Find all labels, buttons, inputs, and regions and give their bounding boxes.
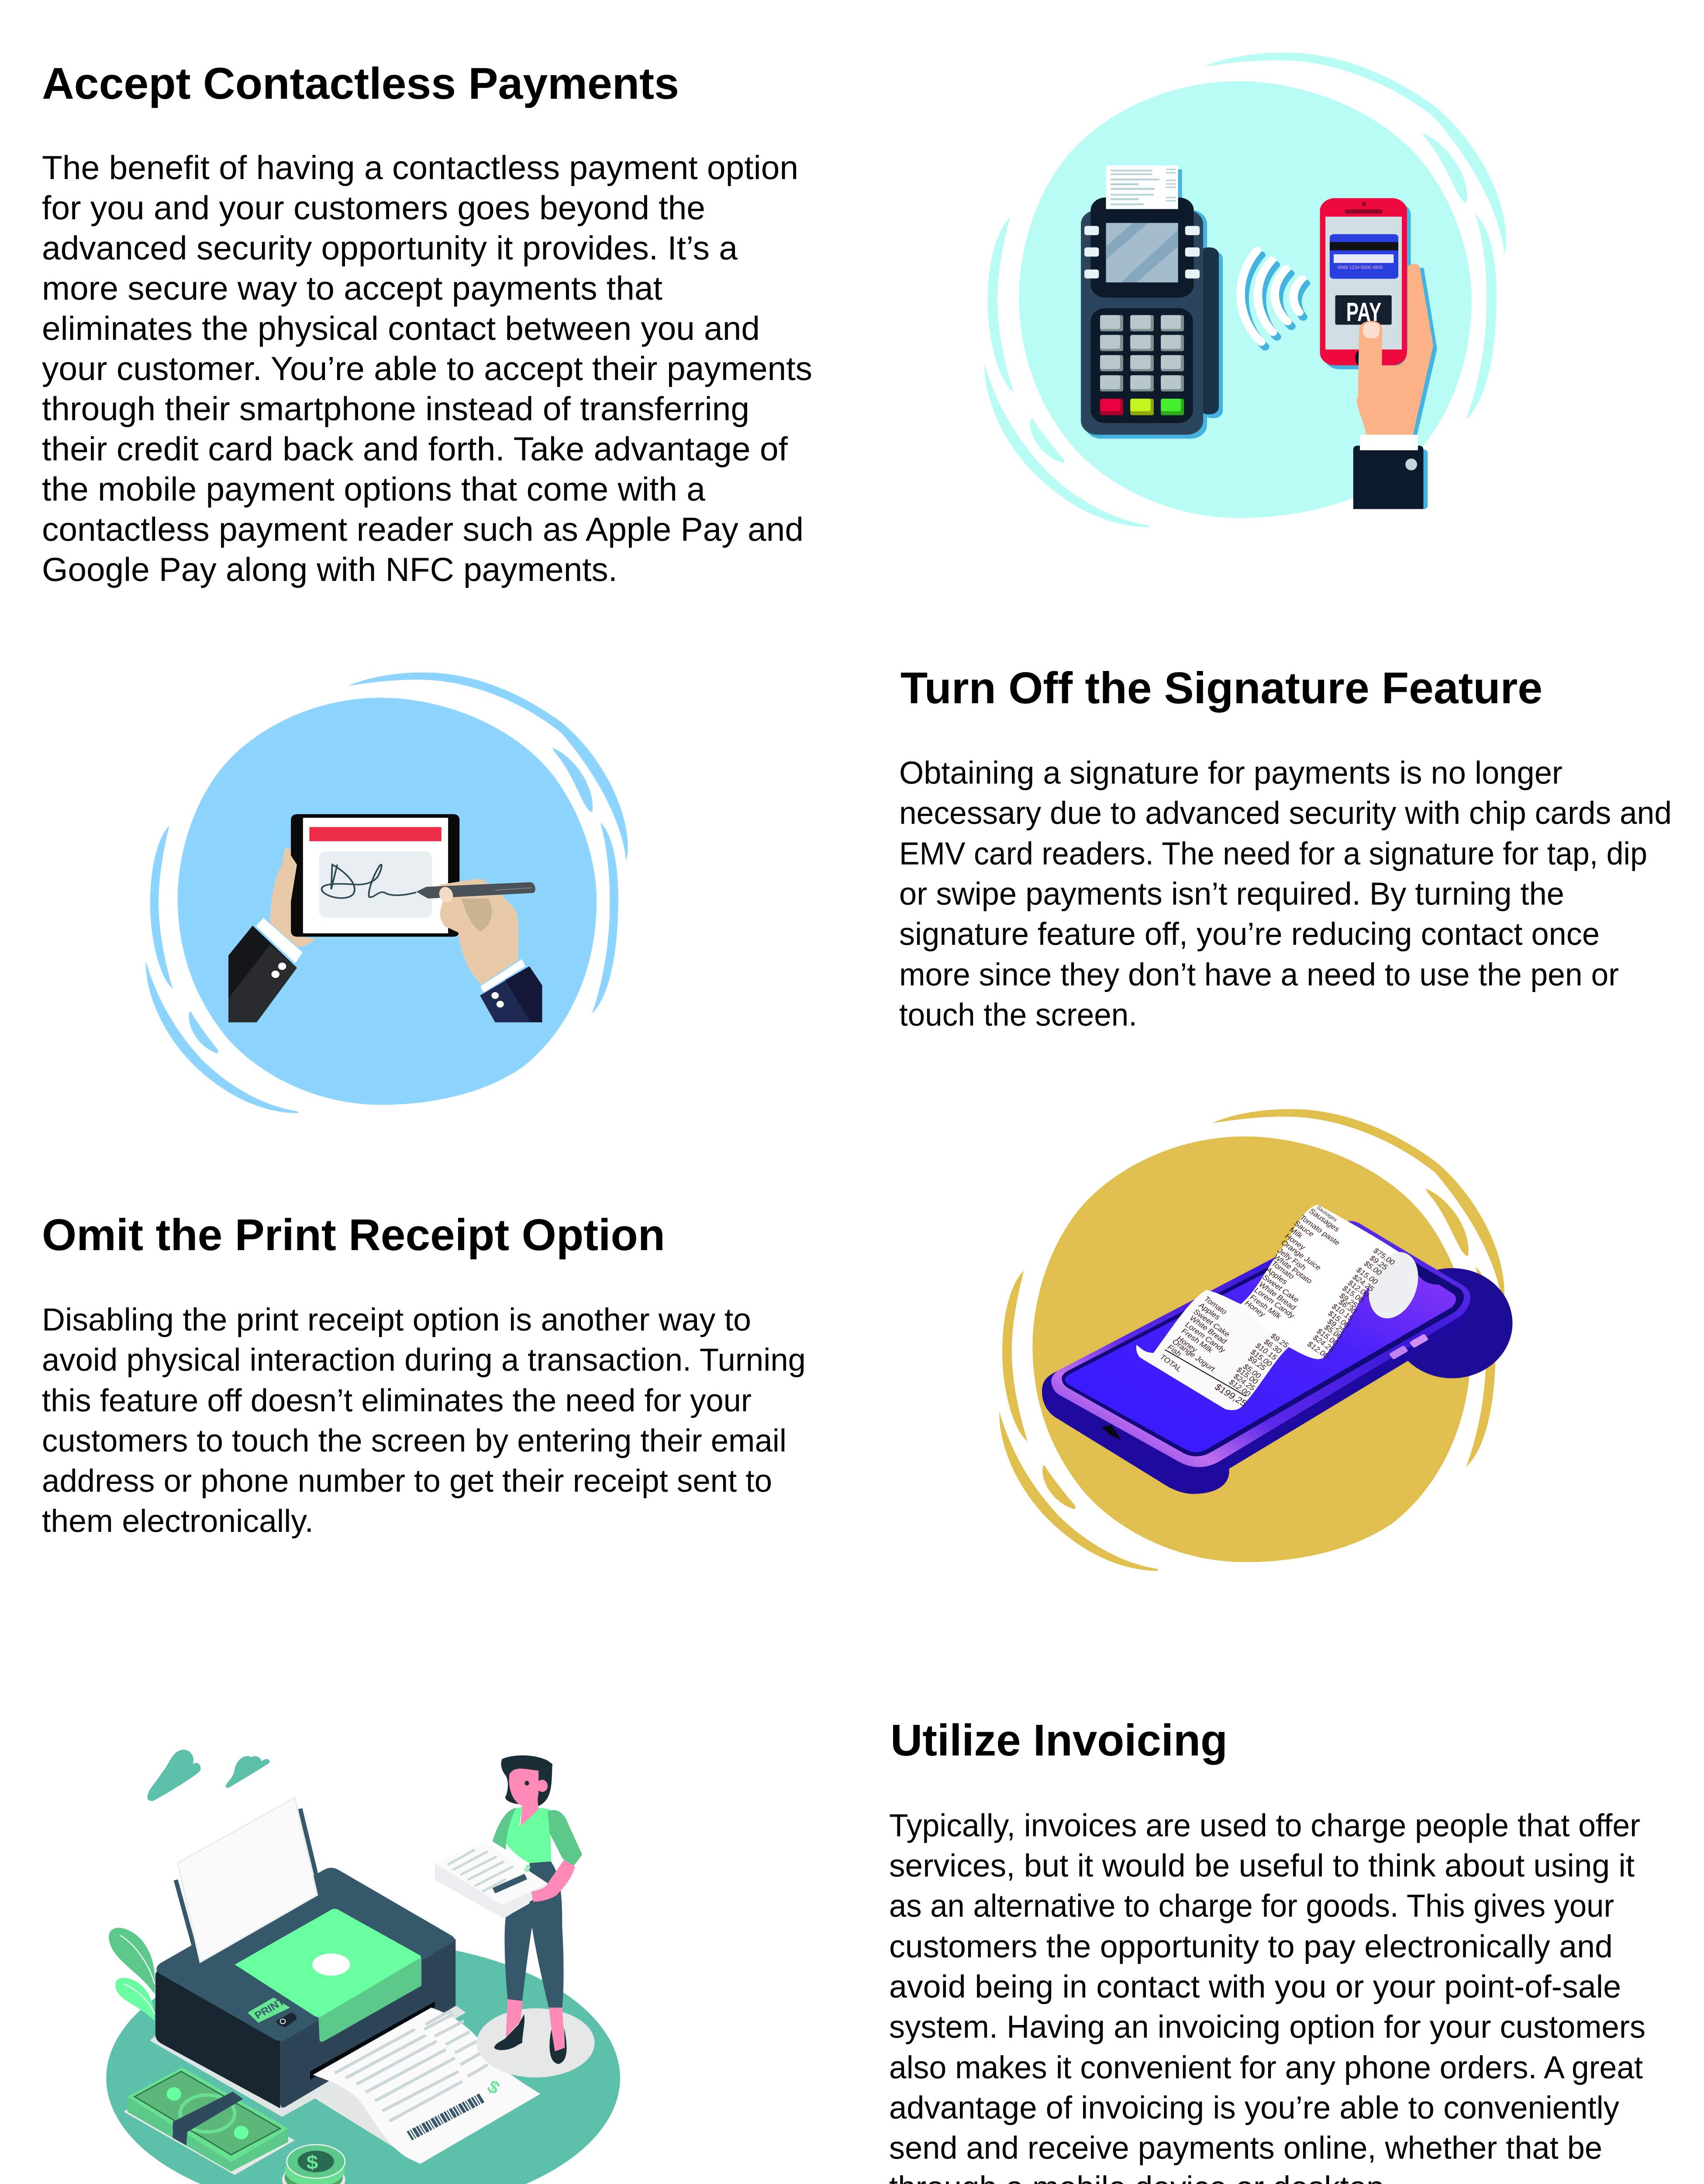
icon: contactless waves	[1241, 250, 1306, 347]
icon: receipt roll: $5.00	[1322, 1323, 1344, 1341]
icon: receipt roll: Milk	[1287, 1226, 1305, 1240]
text block: receipt body: Disabling the print receipt option is another way to	[42, 1302, 751, 1337]
text block: signature body: touch the screen.	[899, 997, 1137, 1033]
text block: contactless body: the mobile payment options that come with a	[42, 471, 705, 508]
icon: receipt roll: $75.00	[1372, 1247, 1397, 1267]
icon: coins: $	[307, 2151, 318, 2173]
icon: right hand with stylus	[416, 878, 542, 1022]
icon: receipt roll: $24.25	[1351, 1273, 1376, 1293]
icon: phone with pay button: 0068 1234 0000 4800	[1338, 265, 1383, 270]
icon: receipt roll: $5.00	[1241, 1362, 1263, 1380]
text block: receipt body: address or phone number to get their receipt sent to	[42, 1463, 772, 1499]
text block: contactless body: The benefit of having a contactless payment option	[42, 149, 798, 187]
icon: receipt roll: $9.25	[1338, 1292, 1359, 1309]
icon: receipt roll: Sweet Cake	[1192, 1308, 1232, 1338]
illustration: printer, money and woman	[106, 1749, 620, 2184]
icon: stack of cash	[124, 2067, 295, 2175]
icon: receipt roll: $15.00	[1341, 1284, 1366, 1304]
text block: invoicing body: as an alternative to charge for goods. This gives your	[889, 1888, 1614, 1924]
icon: receipt roll: Orange Juice	[1279, 1238, 1323, 1272]
illustration: signing on a tablet	[146, 673, 628, 1113]
icon: receipt roll: Fresh Milk	[1248, 1293, 1283, 1320]
icon: receipt roll: TOTAL	[1158, 1353, 1184, 1373]
text block: contactless body: their credit card back and forth. Take advantage of	[42, 431, 788, 468]
icon: receipt roll: White Bread	[1188, 1314, 1229, 1345]
panel: Utilize Invoicing	[106, 1715, 1645, 2184]
icon: receipt roll: $15.00	[1249, 1348, 1274, 1368]
text block: contactless body: Google Pay along with NFC payments.	[42, 551, 617, 588]
icon: receipt roll: Lorem Candy	[1252, 1286, 1297, 1320]
icon: phone with pay button	[1320, 198, 1411, 369]
icon: leaves	[109, 1928, 155, 2021]
icon: receipt roll: $10.15	[1253, 1341, 1279, 1362]
panel: Turn Off the Signature Feature	[146, 663, 1672, 1113]
icon: receipt roll: $12.00	[1227, 1378, 1252, 1398]
icon: phone with pay button: PAY	[1346, 297, 1381, 327]
icon: receipt roll: Apples	[1264, 1266, 1290, 1286]
text block: invoicing body	[889, 1808, 1645, 2184]
icon: receipt roll: $15.00	[1235, 1365, 1260, 1386]
icon: receipt roll: Fresh Milk	[1180, 1327, 1215, 1355]
text block: contactless body: through their smartphone instead of transferring	[42, 390, 749, 428]
icon: printed invoice: $	[483, 2077, 504, 2098]
text block: contactless body	[42, 149, 812, 588]
icon: receipt roll: $9.25	[1246, 1355, 1268, 1372]
icon: card terminal	[1081, 166, 1223, 439]
icon: isometric phone	[1042, 1221, 1512, 1494]
icon: receipt roll: Tomato	[1202, 1295, 1229, 1316]
icon: receipt roll: Sweet Cake	[1261, 1273, 1301, 1304]
panel: Omit the Print Receipt Option	[42, 1109, 1512, 1571]
text block: invoicing body: advantage of invoicing is you’re able to conveniently	[889, 2090, 1619, 2125]
icon: receipt roll: Fish	[1166, 1343, 1183, 1358]
text block: signature body: EMV card readers. The need for a signature for tap, dip	[899, 836, 1647, 871]
icon: ground ellipse	[106, 1942, 620, 2184]
icon: receipt roll: $6.30	[1337, 1298, 1359, 1316]
text block: signature body: signature feature off, you’re reducing contact once	[899, 916, 1600, 952]
icon: clouds	[147, 1749, 269, 1801]
icon: receipt roll: Sausages	[1315, 1205, 1338, 1223]
text block: invoicing body: services, but it would be useful to think about using it	[889, 1848, 1635, 1883]
icon: woman holding invoices: $	[522, 1863, 533, 1874]
heading: Turn Off the Signature Feature: Turn Off the Signature Feature	[900, 663, 1542, 713]
icon: receipt roll: $12.00	[1346, 1279, 1371, 1299]
icon: receipt roll: $24.25	[1231, 1372, 1257, 1392]
icon: receipt roll: Honey	[1175, 1334, 1200, 1354]
icon: receipt roll: $15.00	[1326, 1309, 1352, 1329]
icon: receipt roll: $24.25	[1311, 1334, 1337, 1354]
illustration: phone with digital receipt	[999, 1109, 1512, 1571]
text block: receipt body: customers to touch the screen by entering their email	[42, 1423, 786, 1458]
icon: receipt roll: $199,25	[1213, 1382, 1249, 1408]
panel: Accept Contactless Payments	[42, 52, 1506, 588]
text block: signature body	[899, 755, 1672, 1033]
icon: receipt roll: Tomato paste	[1298, 1213, 1342, 1247]
heading: Accept Contactless Payments: Accept Contactless Payments	[42, 59, 679, 108]
icon: receipt roll: $12.00	[1305, 1340, 1331, 1360]
text block: invoicing body: system. Having an invoicing option for your customers	[889, 2009, 1645, 2045]
icon: printed invoice	[309, 2008, 540, 2164]
text block: invoicing body: Typically, invoices are used to charge people that offer	[889, 1808, 1640, 1843]
icon: receipt roll: White Bread	[1257, 1280, 1298, 1312]
icon: receipt roll: $9.25	[1368, 1254, 1390, 1272]
text block: invoicing body: send and receive payments online, whether that be	[889, 2130, 1602, 2166]
icon: printer: PRINT	[253, 1996, 287, 2022]
text block: contactless body: advanced security opportunity it provides. It’s a	[42, 230, 738, 267]
icon: receipt roll: $10.15	[1330, 1302, 1356, 1322]
icon: printer	[150, 1797, 466, 2117]
icon: pale blue blob and swooshes	[984, 52, 1506, 527]
text block: invoicing body: avoid being in contact with you or your point-of-sale	[889, 1969, 1621, 2004]
text block: signature body: necessary due to advanced security with chip cards and	[899, 795, 1672, 831]
icon: left hand holding tablet	[228, 848, 315, 1022]
icon: gold blob and swooshes	[999, 1109, 1504, 1571]
icon: hand and suit cuff	[1353, 264, 1437, 509]
text block: contactless body: more secure way to accept payments that	[42, 270, 662, 307]
icon: receipt roll	[1136, 1205, 1426, 1410]
icon: receipt roll: Sauce	[1292, 1219, 1316, 1238]
icon: receipt roll: Honey	[1283, 1232, 1307, 1251]
icon: woman holding invoices	[435, 1755, 582, 2064]
text block: receipt body: them electronically.	[42, 1503, 314, 1539]
icon: person's floor shadow	[477, 2008, 595, 2077]
text block: signature body: Obtaining a signature for payments is no longer	[899, 755, 1563, 791]
text block: signature body: or swipe payments isn’t required. By turning the	[899, 876, 1564, 912]
icon: tablet with signature	[291, 814, 459, 936]
text block: contactless body: contactless payment reader such as Apple Pay and	[42, 511, 804, 548]
icon: receipt roll: Sausages	[1307, 1207, 1342, 1233]
text block: receipt body: this feature off doesn’t eliminates the need for your	[42, 1383, 752, 1418]
text block: receipt body: avoid physical interaction during a transaction. Turning	[42, 1342, 806, 1378]
icon: receipt roll: Lorem Candy	[1183, 1320, 1228, 1354]
icon: receipt roll: Jelly Fish	[1276, 1247, 1308, 1272]
icon: receipt roll: $9.25	[1269, 1332, 1291, 1349]
icon: receipt roll: Tomato	[1269, 1259, 1297, 1280]
icon: receipt roll: $9.25	[1325, 1317, 1347, 1335]
icon: receipt roll: Orange Jogurt	[1170, 1337, 1217, 1373]
icon: coins	[282, 2145, 345, 2184]
icon: receipt roll: Honey	[1243, 1299, 1267, 1318]
heading: Utilize Invoicing: Utilize Invoicing	[890, 1715, 1228, 1765]
text block: contactless body: for you and your customers goes beyond the	[42, 190, 705, 227]
text block: contactless body: your customer. You’re able to accept their payments	[42, 350, 812, 387]
icon: receipt roll: $6.30	[1262, 1337, 1284, 1355]
text block: receipt body	[42, 1302, 806, 1539]
heading: Omit the Print Receipt Option: Omit the Print Receipt Option	[42, 1210, 665, 1260]
text block: invoicing body: customers the opportunity to pay electronically and	[889, 1929, 1613, 1964]
icon: receipt roll: White Potato	[1272, 1253, 1314, 1285]
icon: receipt roll: $5.00	[1362, 1259, 1384, 1277]
text block: contactless body: eliminates the physical contact between you and	[42, 310, 760, 347]
icon: receipt roll: Apples	[1197, 1301, 1222, 1321]
text block: signature body: more since they don’t have a need to use the pen or	[899, 957, 1619, 992]
icon: blue blob and swooshes	[146, 673, 628, 1113]
text block: invoicing body: also makes it convenient for any phone orders. A great	[889, 2050, 1643, 2085]
icon: receipt roll: $15.00	[1355, 1266, 1380, 1286]
illustration: payment terminal and phone	[984, 52, 1506, 527]
icon: receipt roll: $15.00	[1315, 1327, 1340, 1347]
